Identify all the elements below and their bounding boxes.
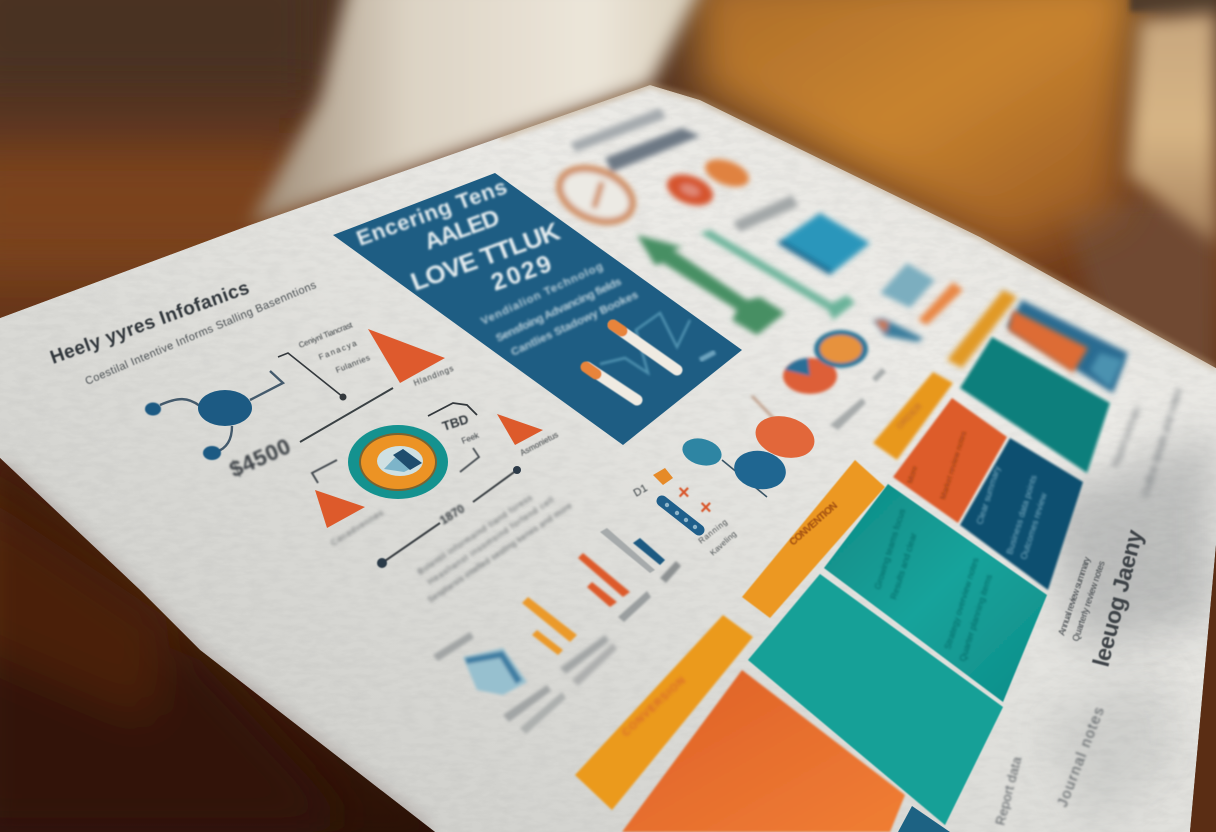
panel text: teal upper: Strategy overview notes	[942, 556, 981, 651]
panel text: orange middle	[905, 430, 968, 501]
main heading: Heely yyres Infofanics	[48, 278, 252, 369]
vertical caption: Quarterly review notes	[1070, 559, 1107, 643]
callout text: Ceniynl Tiancrast	[297, 320, 354, 350]
value label: $4500	[226, 434, 294, 483]
callout text: Fanacya	[317, 338, 358, 362]
blurred far section	[552, 108, 963, 342]
poster subtitle: Sensfoing Advancing fields	[494, 276, 623, 345]
far vertical caption: Report summary	[1111, 405, 1143, 469]
icon: crossed circle	[552, 159, 640, 231]
caption	[433, 632, 474, 661]
caption	[618, 591, 651, 622]
tab label: CONVERSION	[620, 675, 688, 739]
caption	[660, 561, 681, 583]
body paragraph: Heaslianst insomsind forfend cell	[426, 494, 556, 587]
blue box icon	[433, 632, 566, 734]
callout text	[297, 320, 371, 375]
poster title line 4: 2029	[488, 251, 555, 296]
foreground vignette	[0, 458, 435, 832]
panel: far light blue inner	[1090, 353, 1123, 388]
panel: blue bottom corner	[898, 806, 950, 832]
panel: teal lower	[748, 574, 1003, 825]
panel text: teal upper	[872, 507, 994, 663]
icons: small orange badges	[663, 154, 753, 211]
colored blocks panel	[622, 300, 1128, 832]
poster chart	[586, 313, 715, 400]
panel: far teal	[960, 337, 1110, 473]
callout bracket	[278, 353, 343, 397]
triangle small right	[497, 414, 560, 458]
arrow: green up arrow	[637, 235, 785, 335]
bracket small label: Feek	[460, 430, 481, 446]
caption: far	[733, 195, 798, 232]
body paragraph: Bolentil informaind tiand foress	[416, 492, 534, 577]
vertical caption: Annual review summary	[1056, 555, 1092, 637]
triangle large top	[368, 329, 455, 388]
table edge at right	[1190, 540, 1216, 832]
far vertical caption: Outline details and notes	[1139, 386, 1185, 499]
far heading	[570, 108, 700, 172]
bottom vertical caption: Report data	[992, 754, 1025, 827]
dark strip top right	[1130, 0, 1216, 12]
pie chart: orange	[783, 358, 837, 394]
icon: light blue square	[880, 263, 935, 308]
mini bar chart yellow	[522, 597, 617, 686]
tab label: CONVENTION	[788, 500, 840, 548]
pie chart: ring	[814, 330, 868, 368]
connector line	[300, 388, 393, 442]
timeline label: 1870	[437, 501, 468, 528]
mini bar chart orange red	[578, 553, 651, 622]
window light glare	[250, 0, 705, 225]
timeline line	[377, 466, 521, 568]
panel: far blue	[1007, 300, 1128, 393]
target circle icon	[348, 425, 448, 499]
panel text: orange middle: More	[905, 464, 920, 485]
tab label: ORDER	[894, 401, 924, 431]
panel: orange middle	[893, 398, 1007, 523]
callout text: Fulanries	[334, 353, 371, 375]
small label: D1	[632, 482, 650, 500]
x mark: ×	[700, 497, 712, 519]
panel: orange lower	[622, 670, 905, 832]
right margin text	[992, 386, 1185, 827]
poster: blue title block	[333, 173, 742, 445]
arrow: light green arrow	[700, 230, 855, 320]
poster subtitle: Vendialion Technolog	[479, 261, 605, 328]
small icon row	[632, 468, 738, 557]
small caption: Kaveling	[708, 529, 738, 557]
bracket label: TBD	[440, 411, 470, 434]
panel: far orange inner	[1008, 310, 1088, 373]
bracket	[312, 460, 337, 483]
soft far paper edge	[500, 85, 1216, 368]
bracket with labels	[428, 403, 481, 472]
blue lens	[873, 318, 923, 342]
small caption: Ranning	[697, 518, 729, 546]
poster title line 1: Encering Tens	[353, 174, 510, 251]
panel: blue middle	[960, 438, 1083, 590]
node network	[160, 371, 283, 452]
panel: teal upper	[824, 484, 1047, 702]
poster title line 3: LOVE TTLUK	[407, 218, 564, 296]
body paragraph: Sesplarsis intelled sesting kenes and more	[426, 500, 574, 605]
panel text: blue middle: Clear summary	[974, 464, 1002, 526]
panel text: orange middle: Market review notes	[938, 430, 968, 501]
poster title line 2: AALED	[421, 204, 503, 255]
left heading	[48, 278, 319, 388]
mini bar chart grey	[600, 528, 681, 583]
panel text: teal upper: Growing teams focus	[872, 507, 907, 591]
poster subtitle: Cantlies Stadowy Bookes	[509, 289, 640, 359]
triangle caption: Cacadvennes	[329, 507, 385, 548]
icon: blue square	[777, 213, 870, 275]
panel text: blue middle: Business data points	[1004, 473, 1039, 556]
triangle caption: Hlandings	[412, 364, 455, 388]
pie caption small	[872, 368, 886, 382]
pie charts	[783, 330, 886, 430]
vertical heading: leeuog Jaeny	[1088, 527, 1148, 669]
subheading: Coestilal Intentive Informs Stalling Basenntions	[83, 279, 319, 388]
blue ellipses cluster	[679, 396, 819, 497]
small caption	[697, 518, 738, 557]
small triangle caption: Asmonietus	[519, 430, 560, 458]
light patch top right	[1128, 12, 1216, 245]
bottom vertical caption: Journal notes	[1054, 705, 1108, 809]
panel text: blue middle: Outcomes review	[1018, 491, 1049, 561]
caption	[560, 635, 609, 674]
panel text: teal upper: Results and clear	[888, 532, 919, 601]
x mark: ×	[678, 482, 690, 504]
panel text: blue middle	[974, 464, 1049, 561]
panel text: teal upper: Quarter planning items	[957, 573, 994, 663]
node diagram	[145, 320, 393, 483]
yellow header tabs	[575, 290, 1017, 810]
pie caption	[830, 398, 866, 430]
triangle left lower	[312, 460, 385, 548]
orange tag	[918, 282, 963, 325]
